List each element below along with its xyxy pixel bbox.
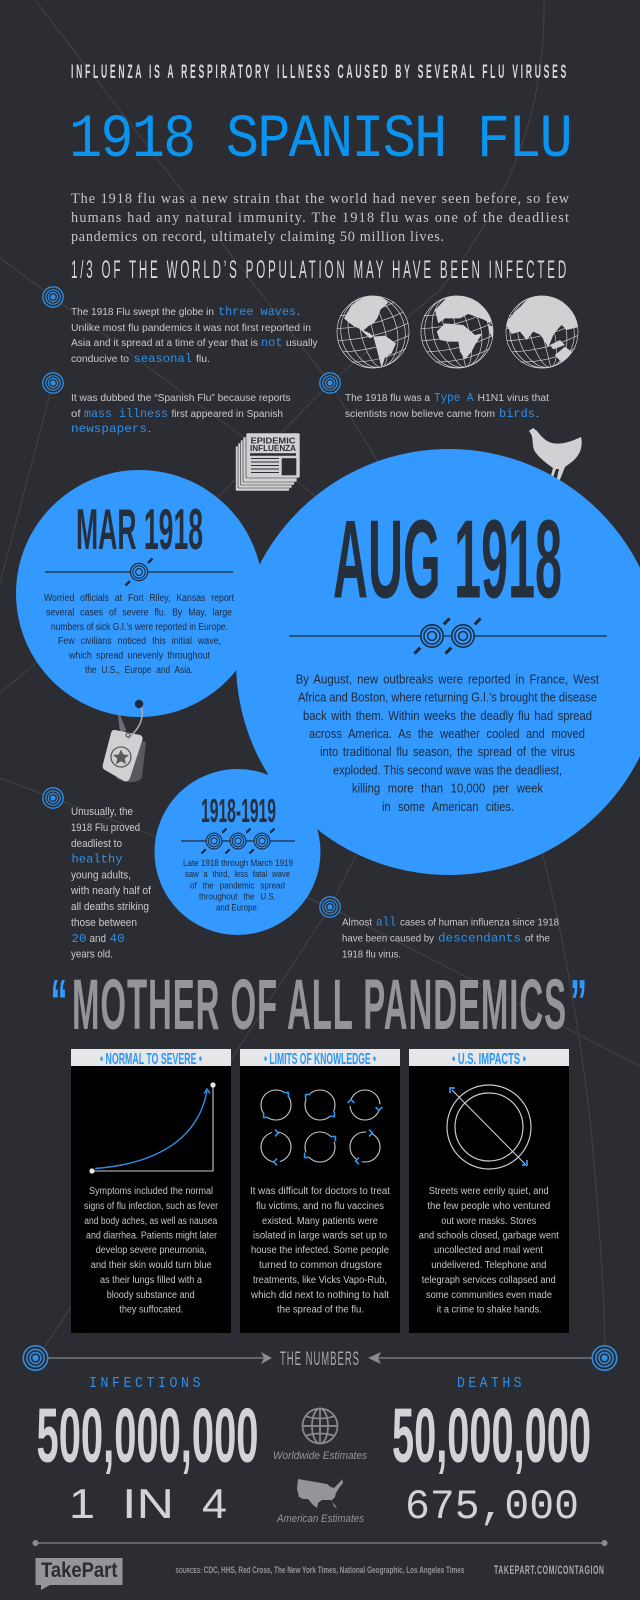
panel: normal to severe: [71, 1049, 231, 1333]
globe: Africa and Europe: [420, 296, 494, 368]
panel text: the few people who ventured: [427, 1201, 550, 1212]
icon: six circular arrows: [261, 1090, 383, 1166]
number: worldwide infections: 500,000,000: [36, 1393, 258, 1479]
note: healthy young adults: 40: [110, 932, 124, 946]
panel text: undelivered. Telephone and: [431, 1260, 546, 1271]
intro paragraph: humans had any natural immunity. The 1918 flu was one of the deadliest: [71, 210, 569, 226]
panel: U.S. impacts: [409, 1049, 569, 1333]
panel text: they suffocated.: [119, 1304, 183, 1316]
description: saw a third, less fatal wave: [185, 869, 290, 879]
note: Spanish flu name: newspapers: [71, 422, 147, 436]
description: By August, new outbreaks were reported in France, West: [296, 672, 599, 686]
note: healthy young adults: deadliest to: [71, 838, 122, 850]
number: American deaths: 675,000: [405, 1483, 579, 1531]
icon: ring marker: [43, 287, 63, 307]
panel text: some communities even made: [426, 1290, 553, 1301]
panel text: and diarrhea. Patients might later: [86, 1230, 218, 1242]
panel text: develop severe pneumonia,: [96, 1245, 207, 1256]
description: Africa and Boston, where returning G.I.’s brought the disease: [298, 690, 597, 704]
note: three waves: seasonal: [134, 352, 192, 366]
panel text: [250, 1186, 390, 1316]
logo: TakePart: TakePart: [41, 1559, 118, 1582]
note: healthy young adults: 20: [72, 932, 86, 946]
column heading: deaths: DEATHS: [457, 1375, 525, 1392]
globe: Americas: [336, 296, 410, 368]
icon: wire globe: [302, 1408, 338, 1444]
icon: ring marker: [43, 788, 63, 808]
note: descendants: cases of human influenza since 1918: [400, 916, 559, 928]
note: Type A virus: birds: [499, 407, 535, 421]
note: three waves: flu.: [196, 353, 210, 365]
panel text: Symptoms included the normal: [89, 1186, 213, 1197]
note: healthy young adults: Unusually, the: [71, 806, 133, 818]
panel text: isolated in large wards set up to: [253, 1230, 388, 1242]
panel text: house the infected. Some people: [251, 1245, 390, 1256]
divider with target: [45, 558, 233, 586]
note: Spanish flu name: .: [148, 423, 151, 435]
note: three waves: three waves: [218, 305, 296, 319]
icon: stacked newspaper: INFLUENZA: [250, 444, 296, 453]
description: numbers of sick G.I.’s were reported in Europe.: [51, 622, 228, 633]
note: healthy young adults: young adults,: [71, 870, 131, 882]
panel text: It was difficult for doctors to treat: [250, 1186, 390, 1197]
number: one in four: [69, 1480, 227, 1527]
description: into traditional flu season, the spread of the virus: [320, 745, 575, 759]
panel text: existed. Many patients were: [262, 1216, 379, 1227]
description: back with them. Within weeks the deadly flu had spread: [303, 709, 592, 723]
icon: dog tag: [103, 715, 146, 782]
panel text: telegraph services collapsed and: [422, 1275, 556, 1286]
note: healthy young adults: 1918 Flu proved: [71, 822, 140, 834]
icon: ring marker: [320, 897, 340, 917]
description: throughout the U.S.: [199, 892, 276, 902]
note: Type A virus: .: [536, 408, 539, 420]
the numbers heading with arrows: THE NUMBERS: [280, 1349, 360, 1370]
note: healthy young adults: those between: [71, 917, 137, 929]
tag string and bead: [126, 700, 143, 739]
note: healthy young adults: all deaths striking: [71, 901, 149, 913]
description: Late 1918 through March 1919: [183, 858, 293, 868]
note: three waves: not: [261, 336, 282, 350]
bubble: March 1918: [16, 470, 263, 717]
note: healthy young adults: healthy: [72, 852, 122, 866]
note: descendants: 1918 flu virus.: [342, 948, 401, 960]
description: which spread unevenly throughout: [68, 650, 210, 662]
panel text: [84, 1186, 219, 1316]
number: one in four: 4: [202, 1480, 227, 1527]
note: Type A virus: The 1918 flu was a: [345, 392, 430, 404]
panel header: • LIMITS OF KNOWLEDGE •: [264, 1051, 376, 1068]
note: three waves: Unlike most flu pandemics it was not first reported in: [71, 322, 311, 334]
note: three waves: .: [297, 306, 300, 318]
note: descendants: all: [376, 916, 396, 930]
note: descendants: Almost: [342, 916, 372, 928]
note: descendants: descendants: [438, 932, 521, 946]
description: [183, 858, 293, 912]
logo: TakePart: [36, 1558, 122, 1590]
panel: limits of knowledge: [240, 1049, 400, 1333]
description: the U.S., Europe and Asia.: [85, 665, 193, 676]
note: healthy young adults: with nearly half of: [70, 885, 152, 897]
note: Spanish flu name: [43, 373, 291, 436]
note: Type A virus: [320, 373, 549, 421]
sources: SOURCES: CDC, HHS, Red Cross, The New York Times, National Geographic, Los Angeles Times: [176, 1565, 464, 1575]
panel text: treatments, like Vicks Vapo-Rub,: [253, 1275, 387, 1286]
description: across America. As the weather cooled and moved: [309, 727, 585, 741]
chart: severity curve: [89, 1082, 216, 1174]
description: [296, 672, 599, 814]
panel text: out wore masks. Stores: [441, 1216, 536, 1227]
note: descendants: have been caused by: [342, 932, 435, 944]
description: Few civilians noticed this initial wave,: [58, 636, 221, 647]
note: Spanish flu name: mass illness: [84, 407, 168, 421]
icon: ring marker: [23, 1346, 48, 1370]
panel text: flu victims, and no flu vaccines: [256, 1201, 384, 1212]
panel text: the spread of the flu.: [277, 1304, 364, 1316]
description: several cases of severe flu. By May, large: [46, 608, 232, 618]
icon: ring marker: [43, 373, 63, 393]
description: [44, 593, 234, 676]
column heading: infections: INFECTIONS: [89, 1375, 204, 1392]
description: in some American cities.: [382, 800, 514, 814]
panel text: and schools closed, garbage went: [419, 1230, 559, 1242]
note: Type A virus: scientists now believe came from: [345, 408, 495, 420]
note: healthy young adults: years old.: [71, 948, 113, 960]
globe: Asia and Australia: [506, 296, 578, 368]
panel text: as their lungs filled with a: [100, 1275, 203, 1286]
icon: ring marker: [320, 373, 340, 393]
note: three waves: conducive to: [71, 353, 129, 365]
icon: hen: [529, 428, 582, 482]
icon: ring marker: [592, 1346, 617, 1370]
label: worldwide estimates: Worldwide Estimates: [273, 1450, 367, 1462]
section heading: mother of all pandemics: “: [50, 968, 68, 1037]
note: Spanish flu name: first appeared in Spanish: [172, 408, 283, 420]
note: Type A virus: H1N1 virus that: [478, 392, 549, 404]
icon: stacked newspaper: [236, 433, 300, 491]
icon: crossed rings: [447, 1085, 531, 1169]
number: one in four: 1: [69, 1480, 95, 1527]
note: healthy young adults: [43, 788, 152, 960]
intro paragraph: pandemics on record, ultimately claiming 50 million lives.: [71, 229, 444, 245]
panel text: which did next to nothing to halt: [250, 1290, 389, 1301]
note: three waves: The 1918 Flu swept the globe in: [71, 306, 214, 318]
intro paragraph: [71, 191, 570, 245]
panel text: it a crime to shake hands.: [437, 1304, 542, 1316]
description: exploded. This second wave was the deadliest,: [333, 764, 562, 778]
description: of the pandemic spread: [190, 880, 285, 890]
number: one in four: IN: [122, 1480, 174, 1527]
label: American estimates: American Estimates: [276, 1513, 364, 1525]
note: three waves: usually: [286, 337, 318, 349]
panel text: uncollected and mail went: [434, 1245, 543, 1256]
note: descendants: [320, 897, 559, 960]
the numbers heading with arrows: [23, 1346, 617, 1370]
panel text: Streets were eerily quiet, and: [429, 1186, 549, 1197]
panel text: and their skin would turn blue: [91, 1260, 212, 1271]
note: three waves: [43, 287, 318, 366]
description: Worried officials at Fort Riley, Kansas report: [44, 593, 234, 604]
panel text: [419, 1186, 559, 1316]
panel text: bloody substance and: [107, 1290, 195, 1301]
divider with targets: [289, 618, 607, 654]
note: healthy young adults: and: [90, 933, 106, 945]
panel text: signs of flu infection, such as fever: [84, 1201, 219, 1212]
panel header: • NORMAL TO SEVERE •: [100, 1051, 202, 1068]
bubble: August 1918: [236, 449, 640, 875]
intro paragraph: The 1918 flu was a new strain that the world had never seen before, so few: [71, 191, 570, 207]
note: Spanish flu name: It was dubbed the “Spanish Flu” because reports: [71, 392, 291, 404]
description: killing more than 10,000 per week: [352, 782, 544, 796]
note: descendants: of the: [525, 932, 550, 944]
panel text: and body aches, as well as nausea: [84, 1216, 218, 1227]
panel header: • U.S. IMPACTS •: [452, 1051, 526, 1068]
footer divider: [32, 1540, 608, 1546]
note: Spanish flu name: of: [71, 408, 81, 420]
note: three waves: Asia and it spread at a time of year that is: [71, 337, 258, 349]
description: and Europe.: [216, 902, 259, 912]
note: Type A virus: Type A: [434, 391, 474, 405]
panel text: turned to common drugstore: [259, 1260, 383, 1271]
divider with targets: [181, 829, 295, 853]
icon: stacked newspaper: EPIDEMIC: [250, 436, 296, 446]
section heading: mother of all pandemics: ”: [570, 968, 587, 1037]
title: 1918 SPANISH FLU: [69, 106, 571, 175]
bubble: March 1918: MAR 1918: [76, 498, 203, 562]
bubble: 1918-1919: [154, 769, 320, 935]
icon: three globes: [336, 296, 578, 368]
bubble: 1918-1919: 1918-1919: [201, 792, 276, 829]
icon: USA map: [297, 1479, 343, 1509]
